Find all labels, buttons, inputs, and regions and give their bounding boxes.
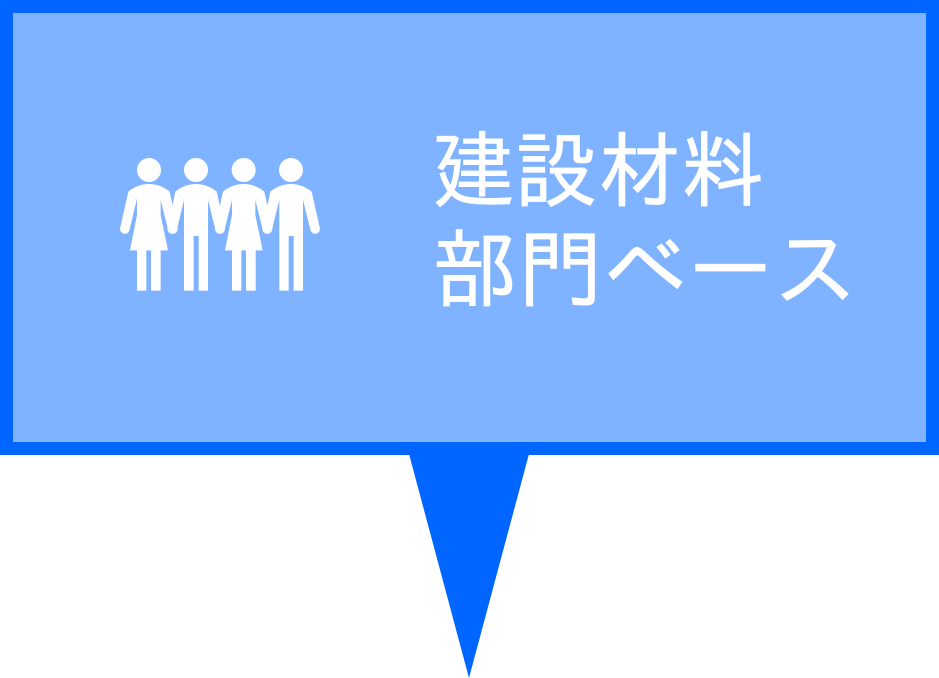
callout box xyxy=(0,0,939,455)
title text: 部門ベース xyxy=(433,226,858,311)
title text: 建設材料 xyxy=(432,127,764,210)
title text xyxy=(432,127,858,311)
